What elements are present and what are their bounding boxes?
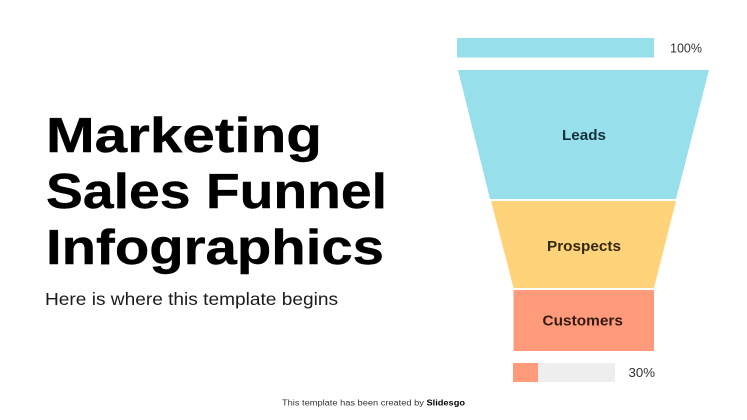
title: Sales Funnel — [46, 165, 387, 219]
bottom progress bar: 30% — [513, 363, 655, 382]
bottom progress bar: 30%: 30% — [628, 366, 655, 380]
top progress bar: 100% — [457, 38, 702, 58]
top progress bar: 100%: 100% — [670, 42, 702, 56]
funnel stage: Customers: Customers — [542, 314, 623, 330]
subtitle: Here is where this template begins — [45, 289, 338, 309]
funnel stage: Prospects: Prospects — [547, 239, 621, 255]
funnel stage: Prospects — [491, 201, 676, 288]
title: Marketing — [46, 109, 322, 163]
footer credit: This template has been created by Slidesgo — [282, 398, 465, 408]
funnel stage: Leads: Leads — [562, 128, 606, 144]
title: Infographics — [46, 221, 384, 275]
title — [46, 109, 387, 275]
funnel — [458, 70, 709, 351]
funnel stage: Leads — [458, 70, 709, 199]
funnel stage: Customers — [514, 290, 654, 351]
